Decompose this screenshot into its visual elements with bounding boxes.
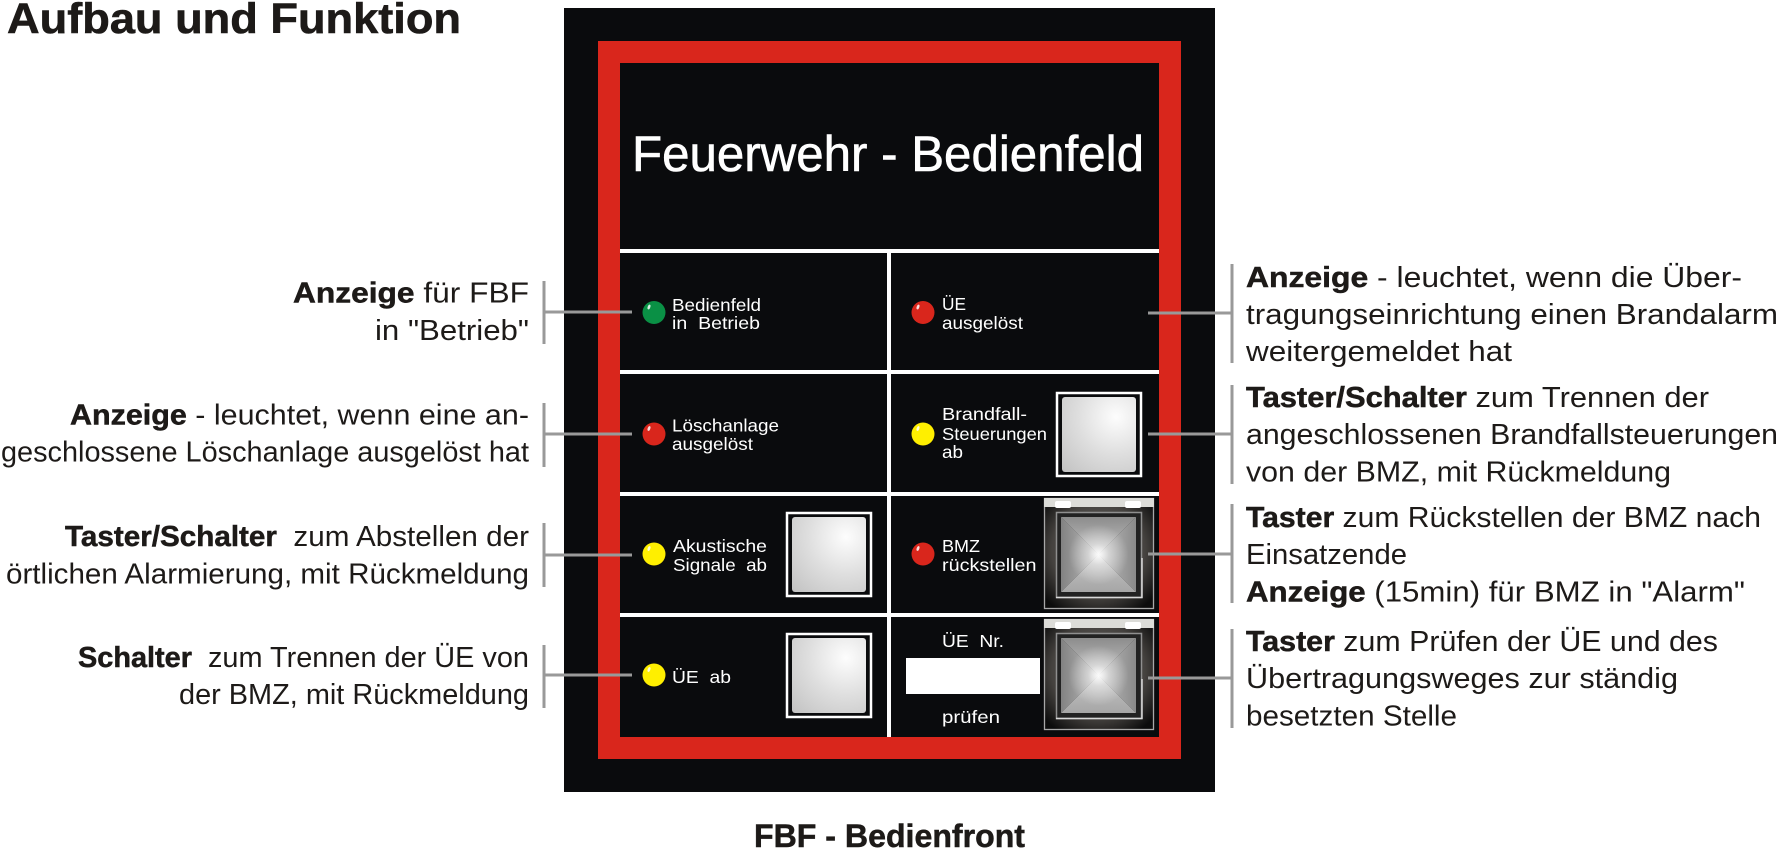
callout: Taster Pruefen UE: Übertragungsweges zur ständig — [1246, 663, 1678, 695]
panel: Feuerwehr-Bedienfeld — [564, 8, 1215, 792]
callout: Schalter UE trennen — [78, 642, 632, 711]
callout: Taster Ruecksetzen BMZ — [1148, 502, 1761, 608]
label: Akustische Signale ab: Signale ab — [673, 555, 767, 575]
button: UE ab — [787, 634, 871, 717]
label: UE Nr.: ÜE Nr. — [942, 631, 1004, 651]
LED: Brandfallsteuerungen ab — [912, 422, 934, 446]
callout: Anzeige Loeschanlage: geschlossene Löschanlage ausgelöst hat — [1, 436, 529, 468]
callout: Anzeige fuer FBF in Betrieb: Anzeige für FBF — [293, 278, 529, 310]
callout: Anzeige Uebertragungseinrichtung — [1148, 262, 1778, 368]
panel housing — [564, 8, 1215, 792]
label: Bedienfeld in Betrieb — [672, 295, 761, 333]
callout: Schalter UE trennen: der BMZ, mit Rückmeldung — [179, 679, 529, 711]
callout: Anzeige Loeschanlage: Anzeige - leuchtet, wenn eine an- — [70, 400, 529, 432]
label: Brandfallsteuerungen ab: Steuerungen — [942, 424, 1047, 444]
button with cover: BMZ rueckstellen — [1044, 498, 1154, 608]
red frame — [609, 52, 1170, 748]
white number field — [906, 658, 1040, 694]
label: Brandfallsteuerungen ab: ab — [942, 442, 963, 462]
callout: Taster/Schalter Brandfallsteuerungen: angeschlossenen Brandfallsteuerungen — [1246, 419, 1778, 451]
label: Akustische Signale ab: Akustische — [673, 536, 767, 556]
callout: Anzeige fuer FBF in Betrieb: in "Betrieb" — [375, 315, 529, 347]
button with cover: UE pruefen — [1044, 619, 1154, 730]
label: UE ab: ÜE ab — [672, 667, 731, 687]
label: pruefen: prüfen — [942, 707, 1000, 727]
LED: Bedienfeld in Betrieb — [642, 301, 666, 324]
label: Bedienfeld in Betrieb: in Betrieb — [672, 313, 760, 333]
callout: Schalter UE trennen: Schalter zum Trennen der ÜE von — [78, 642, 529, 674]
callout: Anzeige Uebertragungseinrichtung: Anzeige - leuchtet, wenn die Über- — [1246, 262, 1742, 294]
callout: Taster/Schalter Brandfallsteuerungen — [1148, 382, 1778, 488]
callout: Taster/Schalter oertliche Alarmierung: örtlichen Alarmierung, mit Rückmeldung — [6, 558, 529, 590]
LED: BMZ rueckstellen — [912, 542, 934, 566]
LED: UE ab — [642, 664, 666, 686]
label: UE ausgeloest — [942, 294, 1023, 333]
callout: Anzeige Uebertragungseinrichtung: weitergemeldet hat — [1245, 336, 1512, 368]
callout: Taster Pruefen UE: Taster zum Prüfen der ÜE und des — [1246, 626, 1718, 658]
LED: UE ausgeloest — [912, 301, 934, 324]
label: Brandfallsteuerungen ab — [942, 404, 1047, 462]
callout: Taster Pruefen UE: besetzten Stelle — [1246, 700, 1457, 732]
LED: Loeschanlage ausgeloest — [642, 422, 666, 446]
label: BMZ rueckstellen — [942, 536, 1036, 575]
callout: Taster Ruecksetzen BMZ: Taster zum Rückstellen der BMZ nach — [1246, 502, 1761, 534]
label: Akustische Signale ab — [673, 536, 767, 575]
label: Loeschanlage ausgeloest: Löschanlage — [672, 416, 779, 436]
label: UE ausgeloest: ÜE — [942, 294, 966, 314]
label: UE ausgeloest: ausgelöst — [942, 313, 1023, 333]
LED: Akustische Signale ab — [642, 542, 666, 566]
callout: Anzeige fuer FBF in Betrieb — [293, 278, 632, 347]
button: Akustische Signale ab — [787, 513, 871, 596]
label: Loeschanlage ausgeloest — [672, 416, 779, 454]
callout: Anzeige Loeschanlage — [1, 400, 632, 468]
callout: Taster/Schalter Brandfallsteuerungen: Taster/Schalter zum Trennen der — [1246, 382, 1709, 414]
callout: Anzeige Uebertragungseinrichtung: tragungseinrichtung einen Brandalarm — [1246, 299, 1778, 331]
field dividers — [620, 249, 1159, 737]
callout: Taster/Schalter Brandfallsteuerungen: von der BMZ, mit Rückmeldung — [1246, 456, 1671, 488]
button: Brandfallsteuerungen ab — [1057, 393, 1141, 476]
label: Loeschanlage ausgeloest: ausgelöst — [672, 434, 753, 454]
callout: Taster Pruefen UE — [1148, 626, 1718, 732]
label: Bedienfeld in Betrieb: Bedienfeld — [672, 295, 761, 315]
callout: Taster/Schalter oertliche Alarmierung — [6, 521, 632, 590]
callout: Taster Ruecksetzen BMZ: Anzeige (15min) für BMZ in "Alarm" — [1246, 576, 1745, 608]
panel heading: Feuerwehr - Bedienfeld — [632, 126, 1144, 182]
label: BMZ rueckstellen: BMZ — [942, 536, 980, 556]
callout: Taster/Schalter oertliche Alarmierung: Taster/Schalter zum Abstellen der — [65, 521, 529, 553]
label: BMZ rueckstellen: rückstellen — [942, 555, 1036, 575]
callout: Taster Ruecksetzen BMZ: Einsatzende — [1246, 539, 1407, 571]
label: Brandfallsteuerungen ab: Brandfall- — [942, 404, 1027, 424]
